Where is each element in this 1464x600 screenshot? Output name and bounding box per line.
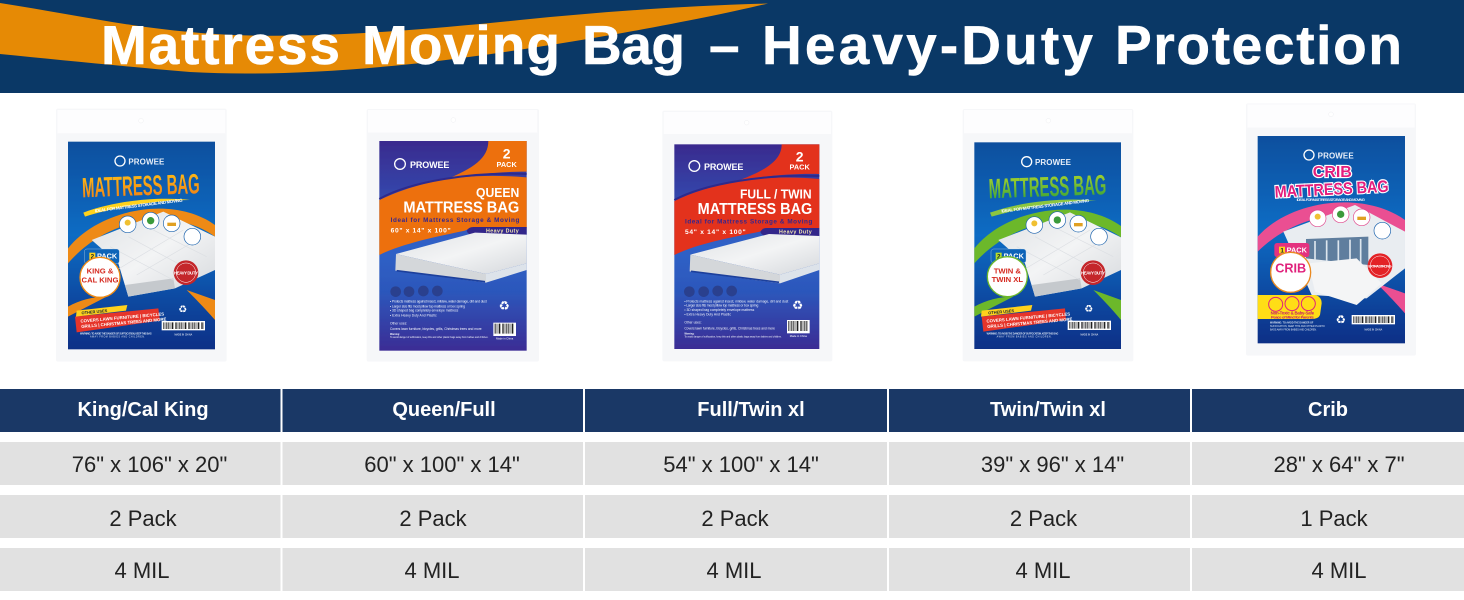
- product: Full/Twin mattress bag: FULL / TWIN: [740, 186, 812, 201]
- product: Full/Twin mattress bag: • Larger size fits most pillow top mattress or box spring: [684, 304, 758, 308]
- header row: [0, 389, 1464, 432]
- product: King/Cal King mattress bag: WARNING: TO AVOID THE DANGER OF SUFFOCATION, KEEP THIS BAG: [80, 332, 152, 335]
- product: Crib mattress bag: BAGS AWAY FROM BABIES AND CHILDREN.: [1270, 328, 1317, 331]
- title: Moving: [362, 14, 560, 76]
- row: thickness: 4 MIL: [706, 558, 762, 583]
- product: Twin/Twin XL mattress bag: TWIN XL: [992, 275, 1023, 284]
- row: thickness: 4 MIL: [114, 558, 170, 583]
- product: Full/Twin mattress bag: PROWEE: [704, 162, 743, 172]
- product: Full/Twin mattress bag: 54" x 14" x 100": [685, 229, 746, 236]
- product: Full/Twin mattress bag: Other uses:: [684, 321, 702, 325]
- title: Mattress: [101, 14, 340, 76]
- product: Queen mattress bag: • Larger size fits most pillow top mattress or box spring: [390, 304, 465, 308]
- comparison table: [0, 389, 1464, 591]
- row: dimensions: 28" x 64" x 7": [1273, 452, 1405, 477]
- product: Full/Twin mattress bag: PACK: [790, 163, 810, 172]
- product: King/Cal King mattress bag: OTHER USES: [81, 308, 108, 315]
- title: –: [709, 14, 740, 76]
- product: Crib mattress bag: Non-Toxic & Baby-Safe: [1271, 311, 1315, 316]
- title: Bag: [582, 14, 685, 76]
- product: King/Cal King mattress bag: IDEAL FOR MATTRESS STORAGE AND MOVING: [95, 198, 183, 213]
- product: Full/Twin mattress bag: [662, 111, 832, 361]
- product: Twin/Twin XL mattress bag: COVERS LAWN FURNITURE | BICYCLES: [986, 311, 1070, 324]
- header row: Full/Twin xl: [697, 399, 805, 421]
- product: Crib mattress bag: CRIB: [1275, 262, 1306, 276]
- header row: Queen/Full: [392, 399, 496, 421]
- product: Queen mattress bag: To avoid danger of suffocation, keep this and other plastic bags away from babies and children.: [390, 336, 489, 339]
- title: [101, 14, 1402, 76]
- product: Queen mattress bag: • Protects mattress against insect, mildew, water damage, dirt and dust: [390, 300, 487, 304]
- row: pack count: 1 Pack: [1300, 506, 1369, 531]
- row: dimensions: 60" x 100" x 14": [364, 452, 520, 477]
- product: Twin/Twin XL mattress bag: TWIN &: [994, 266, 1021, 275]
- row: dimensions: 54" x 100" x 14": [663, 452, 819, 477]
- product: King/Cal King mattress bag: ♻: [178, 305, 187, 316]
- product: Crib mattress bag: EXTRA STRONG: [1368, 264, 1392, 269]
- product: Twin/Twin XL mattress bag: IDEAL FOR MATTRESS STORAGE AND MOVING: [1001, 198, 1090, 214]
- product: Full/Twin mattress bag: ♻: [792, 298, 803, 312]
- product: Full/Twin mattress bag: Covers lawn furniture, bicycles, grills, Christmas trees and more: [684, 326, 775, 330]
- product: Queen mattress bag: PACK: [497, 160, 517, 169]
- header row: Twin/Twin xl: [990, 399, 1106, 421]
- product: Queen mattress bag: Other uses:: [390, 321, 407, 325]
- product: Queen mattress bag: Ideal for Mattress Storage & Moving: [391, 217, 519, 224]
- product: Full/Twin mattress bag: • Extra Heavy Duty And Plastic: [684, 313, 731, 317]
- product: Queen mattress bag: Warning:: [390, 334, 400, 336]
- product: King/Cal King mattress bag: 2: [91, 253, 95, 260]
- product: Queen mattress bag: PROWEE: [410, 160, 449, 170]
- product: Queen mattress bag: [367, 109, 539, 362]
- row: thickness: 4 MIL: [1015, 558, 1071, 583]
- product: King/Cal King mattress bag: AWAY FROM BABIES AND CHILDREN.: [90, 336, 145, 339]
- row: dimensions: [0, 442, 1464, 485]
- product: Twin/Twin XL mattress bag: MATTRESS BAG: [988, 169, 1107, 204]
- product: Queen mattress bag: • Extra Heavy Duty And Plastic: [390, 313, 437, 317]
- product: Full/Twin mattress bag: MATTRESS BAG: [698, 201, 812, 218]
- product: Crib mattress bag: [1246, 103, 1416, 356]
- product: Twin/Twin XL mattress bag: MADE IN CHINA: [1081, 333, 1099, 336]
- product: King/Cal King mattress bag: HEAVY DUTY: [174, 271, 198, 276]
- product: Crib mattress bag: IDEAL FOR MATTRESS STORAGE AND MOVING: [1297, 197, 1365, 202]
- row: pack count: 2 Pack: [399, 506, 468, 531]
- row: pack count: 2 Pack: [1010, 506, 1078, 531]
- product: Crib mattress bag: PACK: [1287, 246, 1308, 255]
- product: Full/Twin mattress bag: Made in China: [790, 334, 807, 338]
- product: King/Cal King mattress bag: MADE IN CHINA: [175, 333, 193, 336]
- product: Full/Twin mattress bag: • 3D shaped bag completely envelope mattress: [684, 308, 755, 312]
- product: Crib mattress bag: 1: [1280, 247, 1284, 254]
- product: Full/Twin mattress bag: Warning:: [684, 333, 695, 335]
- product: Queen mattress bag: 60" x 14" x 100": [391, 228, 451, 235]
- row: pack count: 2 Pack: [109, 506, 178, 531]
- product: Crib mattress bag: SUFFOCATION, KEEP THIS AND OTHER PLASTIC: [1270, 325, 1325, 328]
- product: Queen mattress bag: Made in China: [496, 336, 514, 340]
- product: Twin/Twin XL mattress bag: 2: [997, 253, 1001, 260]
- product: King/Cal King mattress bag: CAL KING: [82, 275, 118, 284]
- product: Full/Twin mattress bag: • Protects mattress against insect, mildew, water damage, dirt and dust: [684, 299, 788, 303]
- product: Crib mattress bag: PROWEE: [1318, 151, 1354, 160]
- product: Queen mattress bag: MATTRESS BAG: [403, 199, 519, 216]
- product: Queen mattress bag: ♻: [499, 299, 510, 313]
- product: Full/Twin mattress bag: Heavy Duty: [779, 230, 812, 236]
- row: thickness: 4 MIL: [404, 558, 460, 583]
- product: Twin/Twin XL mattress bag: PACK: [1004, 252, 1025, 261]
- product: Crib mattress bag: CRIB: [1313, 164, 1352, 181]
- product: Twin/Twin XL mattress bag: WARNING: TO AVOID THE DANGER OF SUFFOCATION, KEEP THIS BAG: [987, 332, 1059, 335]
- product: Twin/Twin XL mattress bag: ♻: [1084, 304, 1093, 315]
- row: dimensions: 76" x 106" x 20": [72, 452, 227, 477]
- product: Twin/Twin XL mattress bag: HEAVY DUTY: [1081, 271, 1105, 276]
- product: Crib mattress bag: MADE IN CHINA: [1365, 328, 1383, 331]
- product: King/Cal King mattress bag: [56, 109, 227, 362]
- product: Full/Twin mattress bag: To avoid danger of suffocation, keep this and other plastic bags away from babies and children.: [684, 335, 782, 338]
- header banner: [0, 0, 1464, 93]
- product: Crib mattress bag: ♻: [1336, 314, 1346, 326]
- product: King/Cal King mattress bag: PACK: [97, 252, 118, 261]
- row: dimensions: 39" x 96" x 14": [981, 452, 1124, 477]
- header row: King/Cal King: [77, 399, 209, 421]
- product: King/Cal King mattress bag: KING &: [87, 267, 114, 276]
- product: Twin/Twin XL mattress bag: PROWEE: [1035, 158, 1072, 167]
- product: Queen mattress bag: • 3D shaped bag completely envelope mattress: [390, 309, 459, 313]
- row: thickness: 4 MIL: [1311, 558, 1367, 583]
- product: Twin/Twin XL mattress bag: AWAY FROM BABIES AND CHILDREN.: [997, 336, 1052, 339]
- product: Twin/Twin XL mattress bag: GRILLS | CHRISTMAS TREES AND MORE: [987, 317, 1073, 329]
- product: Crib mattress bag: Peace of Mind for Parents: [1271, 314, 1314, 319]
- product: Full/Twin mattress bag: 2: [796, 148, 804, 164]
- product: Twin/Twin XL mattress bag: OTHER USES: [988, 308, 1015, 315]
- product: Twin/Twin XL mattress bag: [963, 109, 1133, 361]
- header row: Crib: [1308, 399, 1348, 421]
- product: Crib mattress bag: WARNING: TO AVOID THE DANGER OF: [1270, 322, 1314, 325]
- product: Queen mattress bag: QUEEN: [476, 185, 519, 200]
- product: Queen mattress bag: Heavy Duty: [486, 229, 519, 235]
- row: thickness: [0, 548, 1464, 591]
- product: King/Cal King mattress bag: MATTRESS BAG: [81, 168, 200, 203]
- product: Full/Twin mattress bag: Ideal for Mattress Storage & Moving: [685, 219, 812, 226]
- product: Crib mattress bag: MATTRESS BAG: [1274, 177, 1389, 202]
- product: Queen mattress bag: Covers lawn furniture, bicycles, grills, Christmas trees and more: [390, 327, 482, 331]
- product: King/Cal King mattress bag: PROWEE: [128, 157, 165, 166]
- title: Protection: [1115, 14, 1402, 76]
- product: King/Cal King mattress bag: COVERS LAWN FURNITURE | BICYCLES: [80, 311, 164, 324]
- row: pack count: [0, 495, 1464, 538]
- row: pack count: 2 Pack: [701, 506, 770, 531]
- product: Queen mattress bag: 2: [503, 146, 511, 162]
- orange swoosh: [0, 3, 768, 74]
- title: Heavy-Duty: [762, 14, 1093, 76]
- product: King/Cal King mattress bag: GRILLS | CHRISTMAS TREES AND MORE: [81, 317, 167, 329]
